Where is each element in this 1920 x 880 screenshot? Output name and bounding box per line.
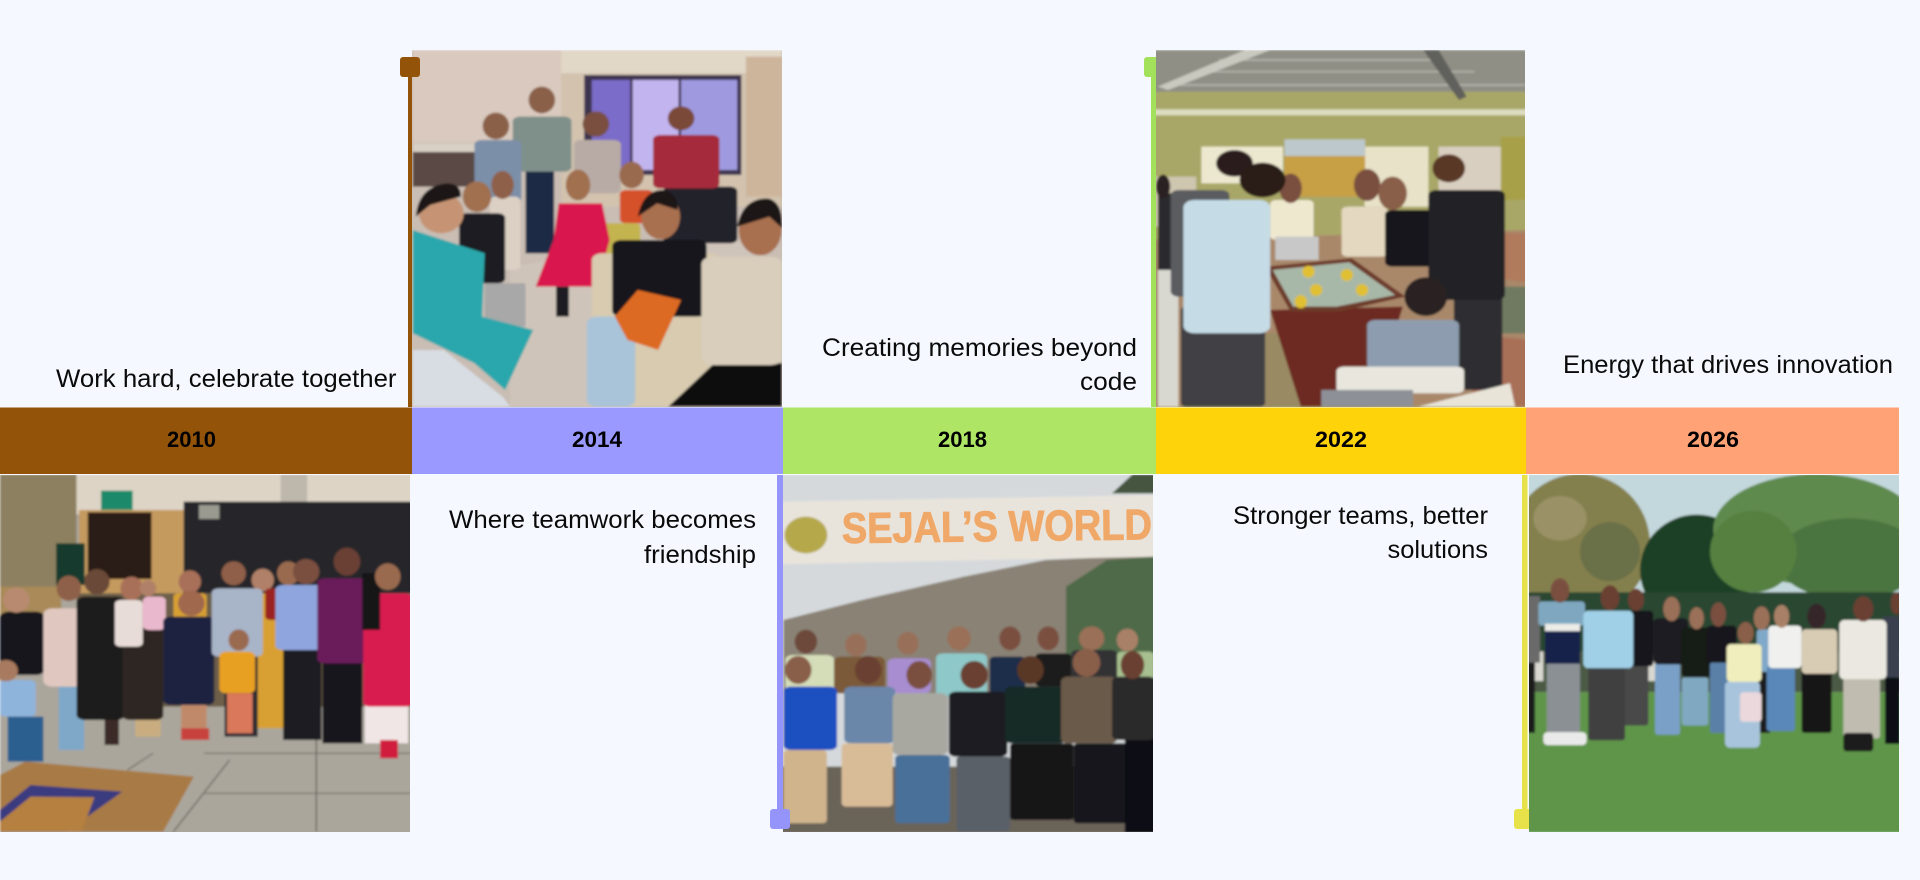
caption: 2018: code <box>1080 368 1137 396</box>
stem and marker: 2018 <box>1144 57 1156 407</box>
year segment 2026: 2026 <box>1687 427 1739 452</box>
stem and marker: 2022 <box>1514 475 1529 829</box>
caption: 2018: Creating memories beyond <box>822 334 1137 362</box>
photo: 2010 team group outdoors <box>0 474 413 834</box>
stem and marker: 2014 <box>770 475 790 829</box>
year segment 2014: 2014 <box>572 427 623 452</box>
year segment 2010 <box>0 408 412 474</box>
caption: 2022: Stronger teams, better <box>1233 502 1488 530</box>
photo: 2026 team on lawn <box>1529 475 1899 832</box>
caption: 2022: solutions <box>1388 536 1488 564</box>
banner lettering in photo: SEJAL’S WORLD <box>842 501 1152 553</box>
year segment 2022: 2022 <box>1315 427 1367 452</box>
caption: 2014: Where teamwork becomes <box>449 506 756 534</box>
stem and marker: 2010 <box>400 57 420 407</box>
year segment 2010: 2010 <box>167 427 216 452</box>
caption: 2026: Energy that drives innovation <box>1563 351 1893 379</box>
caption: 2022 <box>1233 502 1488 564</box>
photo: 2014 team indoors in office <box>408 50 786 410</box>
year segment 2018 <box>783 408 1156 474</box>
caption: 2014 <box>449 506 756 569</box>
year segment 2022 <box>1156 408 1526 474</box>
caption: 2018 <box>822 334 1137 396</box>
photo: 2022 team playing foosball <box>1153 50 1530 410</box>
photo: 2018 team seated at Sejal's World <box>780 474 1158 834</box>
year segment 2026 <box>1526 408 1899 474</box>
caption: 2014: friendship <box>644 541 756 569</box>
timeline band <box>0 408 1899 474</box>
year segment 2014 <box>412 408 783 474</box>
caption: 2010: Work hard, celebrate together <box>56 365 396 393</box>
year segment 2018: 2018 <box>938 427 987 452</box>
